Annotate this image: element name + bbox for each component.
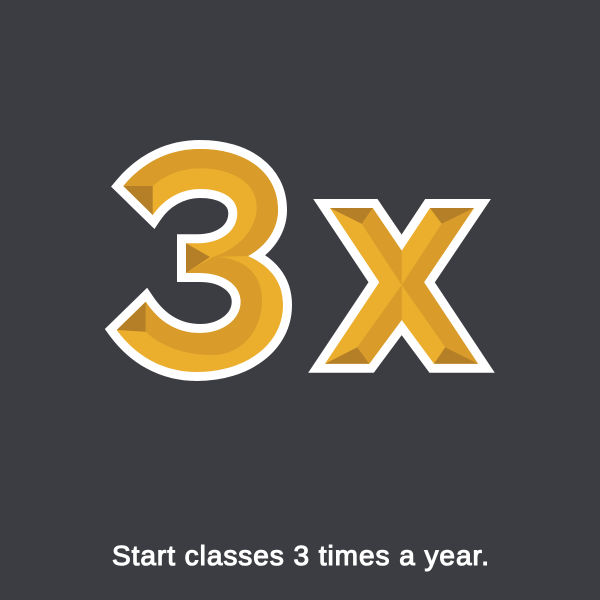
numeral 3 [117, 149, 283, 372]
letter x [325, 208, 478, 364]
caption: Start classes 3 times a year. [112, 540, 489, 571]
